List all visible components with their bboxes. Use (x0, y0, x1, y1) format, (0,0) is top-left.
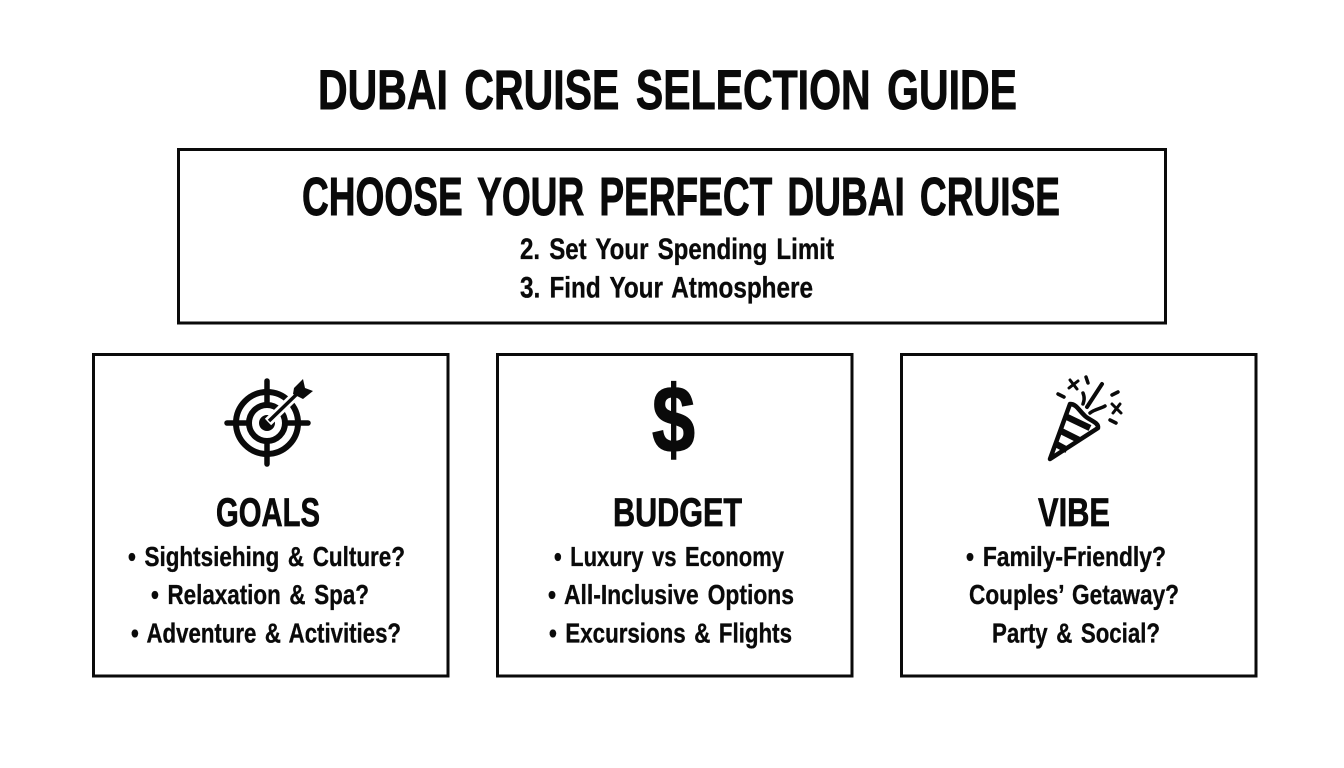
list: goals: • Sightsiehing & Culture? (128, 541, 405, 572)
panel: vibe (902, 354, 1256, 676)
list: budget (548, 541, 794, 648)
list: vibe (966, 541, 1179, 648)
step 2: 2. Set Your Spending Limit (520, 233, 834, 266)
icon: target with arrow (227, 379, 313, 464)
list: goals (128, 541, 405, 648)
step 3: 3. Find Your Atmosphere (520, 272, 813, 304)
heading: goals: GOALS (216, 491, 320, 535)
panel: choose your cruise (178, 150, 1166, 323)
heading: budget: BUDGET (613, 491, 742, 535)
list: vibe: Party & Social? (992, 618, 1160, 648)
list: budget: • Luxury vs Economy (554, 541, 784, 572)
panel: budget (498, 354, 852, 676)
list: goals: • Adventure & Activities? (131, 618, 401, 648)
icon: party popper (1050, 377, 1121, 459)
panel: goals (94, 354, 448, 676)
title: DUBAI CRUISE SELECTION GUIDE (318, 58, 1017, 121)
list: vibe: Couples’ Getaway? (969, 579, 1179, 610)
list: budget: • All-Inclusive Options (548, 579, 794, 610)
icon: dollar sign: $ (652, 367, 695, 473)
list: goals: • Relaxation & Spa? (151, 579, 369, 610)
list: budget: • Excursions & Flights (549, 618, 792, 648)
list: vibe: • Family-Friendly? (966, 541, 1166, 572)
heading: vibe: VIBE (1038, 491, 1110, 535)
